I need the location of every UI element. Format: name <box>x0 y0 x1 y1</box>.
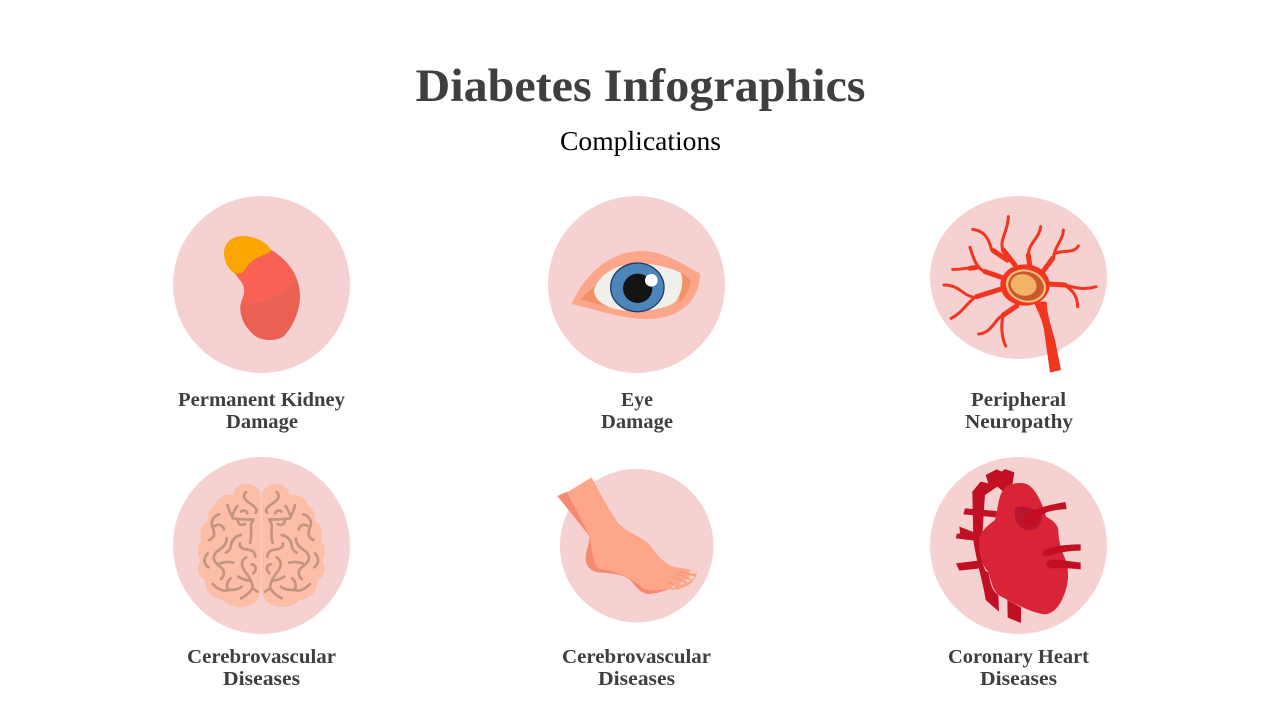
background ellipse: neuron <box>930 196 1107 359</box>
label: cerebrovascular diseases: Cerebrovascular <box>562 646 711 668</box>
icon: heart <box>956 469 1081 623</box>
label: cerebrovascular diseases: Diseases <box>598 668 675 690</box>
label: coronary heart diseases: Coronary Heart <box>948 646 1089 668</box>
label: eye damage: Eye <box>621 389 653 411</box>
label: permanent kidney damage: Permanent Kidney <box>178 389 345 411</box>
icon: eye <box>572 251 700 319</box>
label: coronary heart diseases: Diseases <box>980 668 1057 690</box>
label: eye damage <box>601 389 673 433</box>
subtitle: Complications <box>560 126 721 156</box>
background circle: foot <box>560 469 714 622</box>
panel: coronary heart diseases <box>930 457 1107 690</box>
label: coronary heart diseases <box>948 646 1089 690</box>
infographic canvas <box>173 68 1107 685</box>
label: peripheral neuropathy: Peripheral <box>971 389 1066 411</box>
label: permanent kidney damage <box>178 389 345 433</box>
label: cerebrovascular diseases <box>187 646 336 690</box>
icon: foot <box>557 477 697 594</box>
panel: cerebrovascular diseases (brain) <box>173 457 350 690</box>
label: permanent kidney damage: Damage <box>226 411 298 433</box>
label: peripheral neuropathy: Neuropathy <box>965 411 1073 433</box>
label: cerebrovascular diseases: Cerebrovascular <box>187 646 336 668</box>
label: cerebrovascular diseases: Diseases <box>223 668 300 690</box>
label: eye damage: Damage <box>601 411 673 433</box>
background circle: eye <box>548 196 725 373</box>
background circle: brain <box>173 457 350 634</box>
panel: cerebrovascular diseases (foot) <box>557 469 714 690</box>
icon: brain <box>198 484 325 607</box>
label: cerebrovascular diseases <box>562 646 711 690</box>
label: peripheral neuropathy <box>965 389 1073 433</box>
panel: kidney damage <box>173 196 350 433</box>
background circle: heart <box>930 457 1107 634</box>
background circle: kidney <box>173 196 350 373</box>
icon: kidney <box>224 236 300 340</box>
panel: eye damage <box>548 196 725 433</box>
panel: peripheral neuropathy <box>930 196 1107 433</box>
icon: neuron <box>944 217 1096 373</box>
title: Diabetes Infographics <box>416 60 866 112</box>
